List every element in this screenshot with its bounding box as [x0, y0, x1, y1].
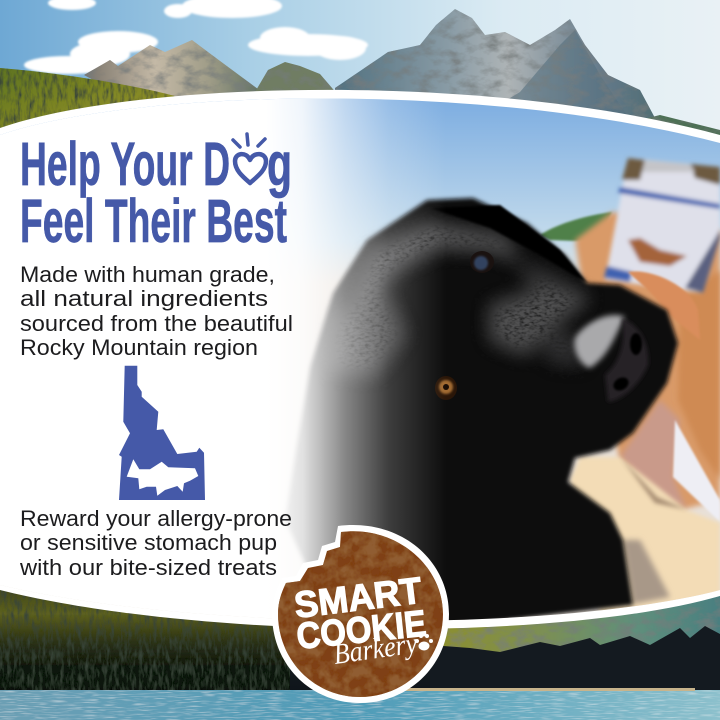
fingers	[628, 271, 700, 340]
icon: paw	[415, 634, 433, 650]
icon: Idaho state with fish	[119, 366, 205, 500]
photo panel: dog with treat package	[0, 90, 720, 640]
lake	[0, 690, 720, 720]
brand wordmark	[292, 570, 428, 657]
treat package	[604, 158, 720, 293]
body text: reward: or sensitive stomach pup	[20, 530, 277, 555]
dog eyes	[470, 251, 494, 273]
lap	[570, 457, 720, 612]
body text: ingredients: Made with human grade,	[20, 262, 275, 287]
heading line 2: Feel Their Best	[20, 187, 287, 255]
distant trees	[540, 212, 612, 242]
bottom forest	[0, 580, 720, 692]
brand wordmark: SMART	[292, 570, 424, 626]
body text: ingredients	[20, 262, 293, 360]
clouds	[24, 0, 368, 74]
dog	[285, 198, 678, 640]
heading line 1: Help Your D	[20, 130, 230, 198]
dog nose	[574, 315, 625, 368]
script word: Barkery	[332, 628, 419, 671]
forest hill	[0, 68, 175, 140]
shirt	[673, 420, 720, 522]
body text: reward: with our bite-sized treats	[19, 555, 277, 580]
dog fur highlights	[330, 222, 590, 375]
cookie badge	[272, 525, 449, 703]
background: sky	[0, 0, 720, 140]
body text: ingredients: Rocky Mountain region	[20, 335, 258, 360]
body text: ingredients: sourced from the beautiful	[20, 311, 293, 336]
heading	[20, 130, 292, 255]
white curved panel	[0, 90, 720, 629]
arm and hand	[575, 212, 720, 510]
heart letter with rays	[233, 134, 266, 183]
body text: reward	[19, 506, 292, 580]
body text: ingredients: all natural ingredients	[20, 286, 268, 311]
shoreline	[405, 688, 695, 691]
body text: reward: Reward your allergy-prone	[20, 506, 292, 531]
heading letter g: g	[267, 130, 292, 198]
dog hair flap	[430, 205, 587, 283]
mountains left	[84, 40, 338, 110]
mountains right	[335, 9, 720, 160]
brand wordmark: COOKIE	[295, 603, 428, 657]
logo: Smart Cookie Barkery	[272, 525, 449, 703]
white fade over photo	[0, 98, 436, 618]
